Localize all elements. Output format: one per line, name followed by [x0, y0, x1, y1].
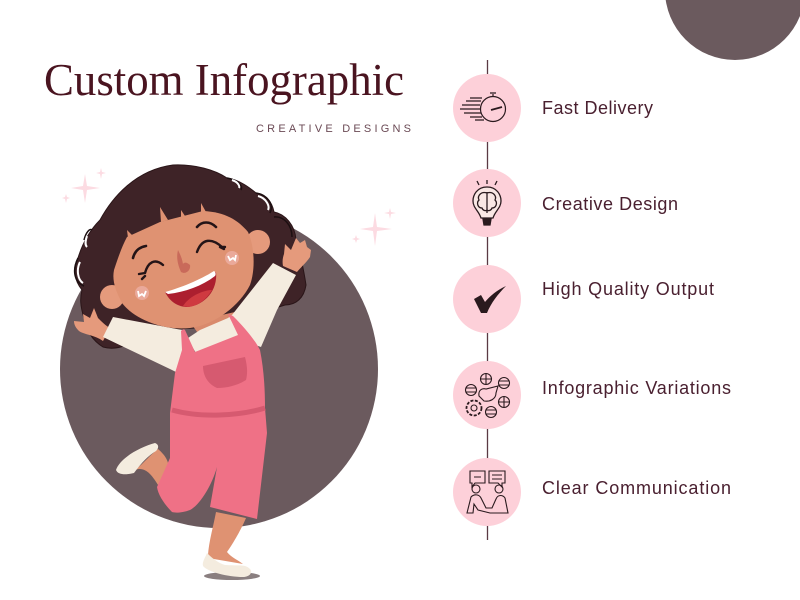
hair curls — [75, 178, 292, 286]
back shoe — [116, 443, 158, 474]
nose — [177, 250, 190, 273]
item: infographic variations — [453, 361, 731, 429]
icon: hand and options — [466, 374, 510, 418]
item: high quality output — [453, 265, 714, 333]
right hand — [283, 238, 311, 272]
label: Creative Design — [542, 194, 678, 214]
character: girl — [74, 165, 311, 580]
teeth — [165, 271, 216, 294]
shirt — [103, 263, 296, 373]
cheeks — [135, 286, 149, 300]
overalls — [157, 314, 267, 519]
belt — [172, 408, 265, 415]
neck — [190, 312, 235, 336]
subtitle: CREATIVE DESIGNS — [256, 123, 411, 135]
hair — [75, 165, 306, 348]
shadow — [204, 572, 260, 580]
label: Clear Communication — [542, 478, 731, 498]
timeline — [486, 60, 488, 540]
item: clear communication — [453, 458, 731, 526]
label: Fast Delivery — [542, 98, 653, 118]
title: Custom Infographic — [44, 55, 404, 105]
icon: two people talking — [467, 471, 508, 513]
icon: check mark — [474, 286, 506, 313]
item: fast delivery — [453, 74, 653, 142]
pocket — [203, 357, 247, 388]
label: High Quality Output — [542, 279, 714, 299]
icon: stopwatch — [460, 93, 506, 122]
ears — [246, 230, 270, 254]
fringe slits — [127, 203, 206, 238]
front leg — [208, 512, 246, 564]
backdrop circle — [60, 210, 378, 528]
eyebrows — [133, 222, 216, 258]
front shoe — [203, 553, 251, 577]
label: Infographic Variations — [542, 378, 731, 398]
sparkles — [62, 168, 396, 246]
corner circle — [665, 0, 800, 60]
face — [113, 211, 254, 328]
icon: light bulb brain — [473, 180, 501, 225]
item: creative design — [453, 169, 678, 237]
eyes — [139, 241, 225, 279]
back leg — [135, 449, 168, 485]
left hand — [74, 308, 110, 341]
mouth — [165, 272, 216, 307]
